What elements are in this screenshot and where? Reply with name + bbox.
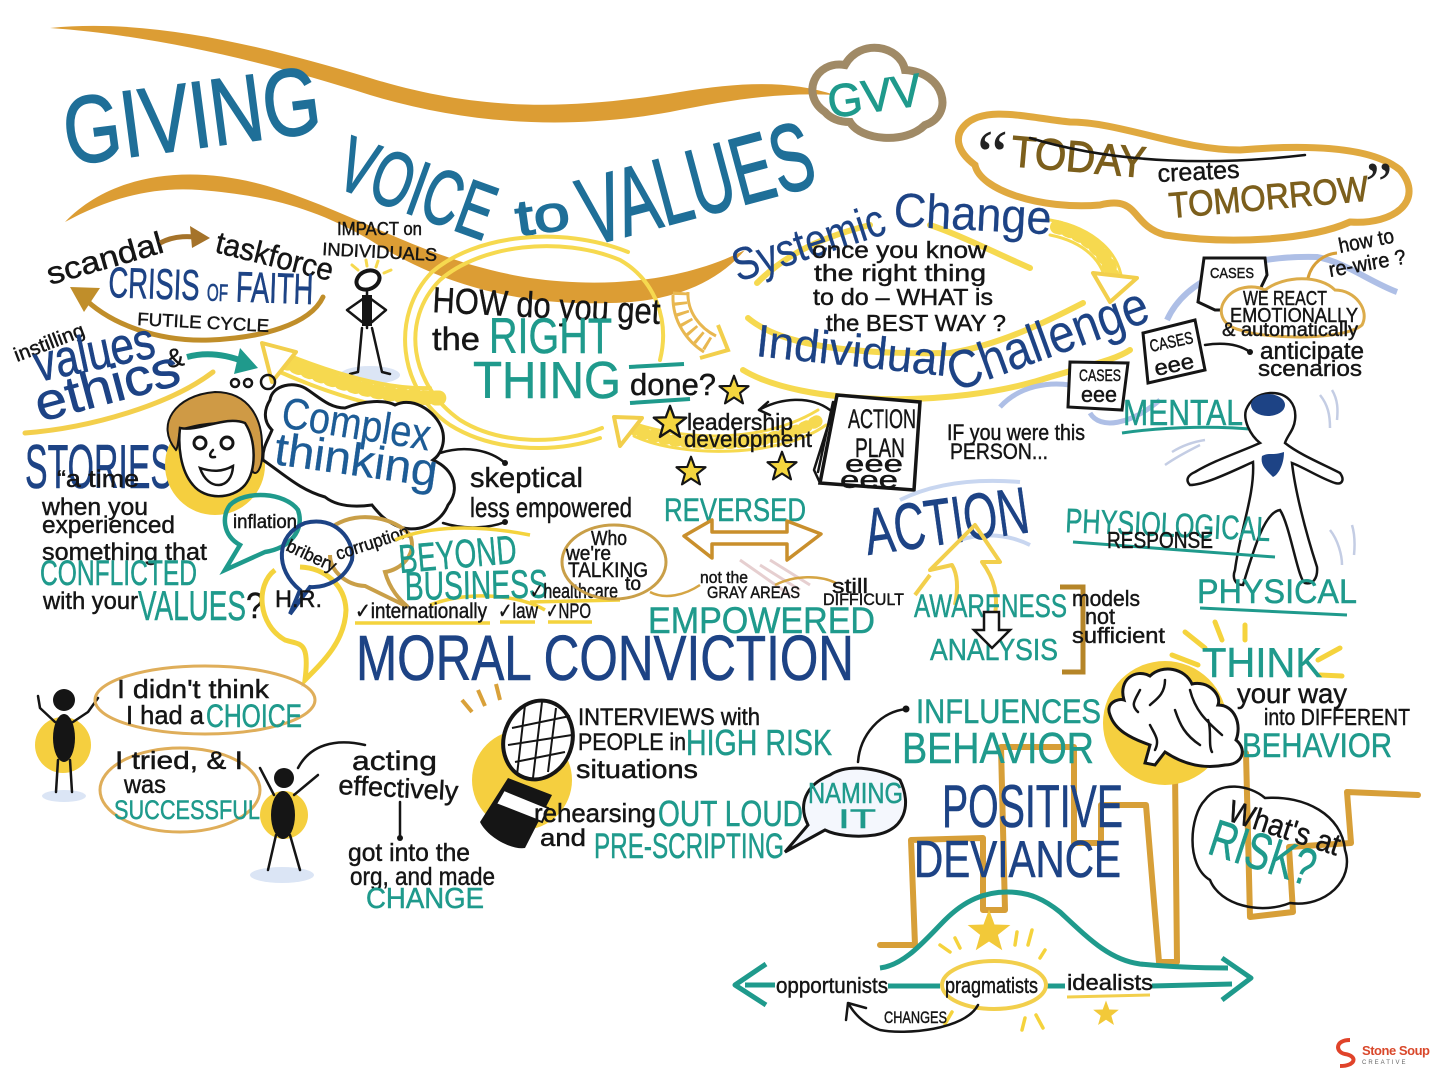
cases and reaction cluster: eee: [1081, 382, 1117, 407]
microphone with interview text: PEOPLE in: [578, 729, 686, 756]
right thing text: HOW do you get: [432, 279, 661, 332]
positive deviance: [914, 773, 1123, 889]
action plan notepad: PLAN: [855, 433, 905, 463]
who we're talking to bubble: to: [625, 574, 641, 595]
cases and reaction cluster: & automatically: [1222, 320, 1359, 341]
gold stepped line behind positive deviance: [880, 747, 1418, 962]
title: GIVING: [57, 47, 327, 186]
cases and reaction cluster: CASES: [1079, 366, 1121, 385]
cases and reaction cluster: CASES: [1148, 328, 1195, 356]
second figure acting effectively: org, and made: [350, 863, 495, 891]
cloud quote: today creates tomorrow: creates: [1157, 156, 1240, 188]
action plan notepad: eee: [845, 451, 903, 478]
skeptical and less empowered: skeptical: [470, 462, 583, 493]
complex thinking thought bubble: Complex: [278, 388, 434, 460]
what's at risk cloud: [1192, 787, 1347, 908]
stories text block: when you: [41, 494, 148, 521]
think your way with brain: your way: [1237, 678, 1347, 709]
left figure with choice bubble: CHOICE: [206, 698, 302, 734]
who we're talking to bubble: Who: [591, 528, 627, 550]
right thing text: done?: [630, 367, 716, 402]
empowered with notes: not the: [700, 568, 748, 587]
values and ethics: instilling: [11, 320, 88, 367]
rehearsing out loud and pre-scripting: OUT LOUD: [658, 793, 803, 834]
bell curve with opportunists pragmatists idealists: idealists: [1067, 970, 1153, 995]
beyond business: BUSINESS: [404, 563, 548, 609]
beyond business: [355, 528, 620, 623]
reversed with double arrow: REVERSED: [664, 492, 806, 528]
cases and reaction cluster: EMOTIONALLY: [1230, 305, 1358, 327]
awareness analysis action arrow: [914, 525, 1165, 672]
crisis of faith block: CRISIS OF FAITH: [108, 259, 314, 314]
title: to: [512, 184, 573, 247]
microphone with interview text: HIGH RISK: [686, 722, 832, 763]
if you were this person: IF you were this: [947, 420, 1085, 445]
reversed with double arrow: [664, 492, 821, 595]
awareness analysis action arrow: ANALYSIS: [930, 632, 1058, 667]
systemic change heading and text: Change: [892, 184, 1053, 245]
systemic change heading and text: to do – WHAT is: [813, 284, 993, 310]
successful bubble: [100, 747, 260, 832]
naming it speech bubble: NAMING: [808, 778, 903, 810]
right thing text: RIGHT: [489, 308, 612, 364]
beyond business: ✓healthcare: [530, 581, 618, 603]
cloud quote: today creates tomorrow: [958, 114, 1409, 240]
bell curve with opportunists pragmatists idealists: CHANGES: [884, 1008, 947, 1027]
right thing text: [432, 279, 716, 410]
empowered with notes: still: [832, 576, 868, 598]
influences behavior: BEHAVIOR: [902, 724, 1094, 773]
crisis of faith block: FUTILE CYCLE: [137, 309, 270, 336]
who we're talking to bubble: we're: [565, 543, 611, 565]
cases and reaction cluster: how to: [1337, 225, 1396, 258]
second figure acting effectively: acting: [352, 746, 437, 776]
awareness analysis action arrow: models: [1072, 586, 1140, 611]
stone soup creative logo: [1338, 1040, 1430, 1066]
stone soup creative logo: CREATIVE: [1362, 1060, 1408, 1066]
successful bubble: was: [123, 771, 166, 799]
bell curve with opportunists pragmatists idealists: opportunists: [776, 973, 888, 998]
values and ethics: values: [28, 312, 160, 394]
stars: leadership development: leadership: [687, 409, 793, 435]
think your way with brain: [1103, 622, 1410, 785]
influences behavior: [858, 693, 1101, 773]
cloud: GVV: [812, 48, 942, 138]
hatched gold arrow toward individual challenge: [673, 292, 728, 358]
body figure: [1165, 390, 1355, 585]
crisis of faith block: [42, 225, 337, 340]
big yellow circle around right thing: [405, 237, 663, 448]
second figure acting effectively: CHANGE: [366, 883, 484, 915]
cloud: GVV: GVV: [824, 63, 925, 128]
action plan notepad: ACTION: [848, 404, 916, 434]
second figure acting effectively: got into the: [348, 839, 470, 867]
values and ethics: ethics: [28, 339, 186, 434]
smiling face: [165, 392, 265, 515]
beyond business: ✓law: [498, 600, 539, 623]
awareness analysis action arrow: AWARENESS: [914, 588, 1067, 624]
speech bubbles: inflation bribery corruption: inflation: [233, 512, 297, 533]
empowered with notes: GRAY AREAS: [707, 583, 800, 602]
impact on individuals figure: [322, 219, 438, 384]
impact on individuals figure: INDIVIDUALS: [322, 239, 438, 265]
awareness analysis action arrow: sufficient: [1072, 623, 1165, 648]
stories text block: VALUES: [138, 582, 246, 629]
bell curve with opportunists pragmatists idealists: [735, 892, 1251, 1032]
skeptical and less empowered: [440, 449, 632, 527]
left figure with choice bubble: I didn't think: [117, 674, 270, 704]
cloud quote: today creates tomorrow: ”: [1365, 151, 1393, 219]
action plan notepad: [814, 395, 920, 494]
microphone with interview text: INTERVIEWS with: [578, 704, 760, 731]
speech bubbles: inflation bribery corruption: [225, 495, 412, 680]
skeptical and less empowered: less empowered: [470, 492, 632, 523]
positive deviance: POSITIVE: [942, 773, 1123, 840]
action heading: ACTION: [860, 473, 1033, 569]
systemic change heading and text: the right thing: [814, 260, 986, 286]
cases and reaction cluster: anticipate: [1260, 338, 1364, 365]
right thing text: the: [432, 321, 480, 357]
complex thinking thought bubble: [231, 375, 454, 529]
yellow loop around systemic change and individual challenge: [743, 220, 1137, 399]
banner swoosh: lower gold wave: [65, 174, 745, 303]
what's at risk cloud: What's at: [1224, 793, 1345, 863]
influences behavior: INFLUENCES: [916, 693, 1101, 731]
microphone with interview text: situations: [576, 754, 698, 784]
cases and reaction cluster: [1000, 225, 1408, 423]
who we're talking to bubble: TALKING: [568, 559, 648, 582]
stories text block: with your: [42, 588, 138, 615]
stories text block: ?: [246, 585, 264, 626]
complex thinking thought bubble: thinking: [272, 422, 441, 497]
mental heading: MENTAL: [1123, 392, 1243, 433]
yellow chevron arrow band toward crisis: [262, 343, 440, 412]
systemic change heading and text: [725, 184, 1053, 336]
cloud quote: today creates tomorrow: TOMORROW: [1167, 168, 1370, 226]
stories text block: experienced: [42, 512, 175, 539]
cloud quote: today creates tomorrow: “: [977, 117, 1008, 194]
stories text block: [25, 433, 264, 629]
physiological response: PHYSIOLOGICAL: [1065, 502, 1271, 549]
cases and reaction cluster: re-wire ?: [1327, 246, 1408, 282]
values and ethics: &: [164, 341, 186, 374]
individual challenge heading: Individual: [754, 314, 950, 386]
rehearsing out loud and pre-scripting: PRE-SCRIPTING: [594, 827, 784, 866]
action heading: [860, 473, 1033, 569]
awareness analysis action arrow: not: [1085, 604, 1115, 629]
what's at risk cloud: RISK?: [1202, 809, 1323, 898]
speech bubbles: inflation bribery corruption: bribery: [283, 535, 340, 576]
beyond business: ✓internationally: [355, 600, 487, 623]
banner swoosh: upper gold wave: [50, 26, 835, 122]
successful bubble: I tried, & I: [115, 747, 243, 775]
stories text block: STORIES: [25, 433, 173, 502]
physiological response: RESPONSE: [1107, 527, 1213, 553]
stories text block: CONFLICTED: [40, 554, 197, 593]
individual challenge heading: Challenge: [939, 275, 1156, 403]
stars: leadership development: [654, 376, 830, 484]
title: [57, 47, 825, 266]
think your way with brain: THINK: [1202, 639, 1322, 686]
empowered with notes: [648, 568, 904, 641]
stars: leadership development: development: [684, 426, 813, 452]
crisis of faith block: scandal: [42, 225, 167, 292]
title: VOICE: [327, 119, 508, 257]
think your way with brain: BEHAVIOR: [1242, 727, 1392, 765]
stories text block: something that: [42, 539, 207, 566]
positive deviance: DEVIANCE: [914, 831, 1121, 889]
if you were this person: [947, 420, 1085, 464]
cloud quote: today creates tomorrow: TODAY: [1009, 127, 1148, 188]
left figure with choice bubble: I had a: [126, 700, 205, 730]
cases and reaction cluster: CASES: [1210, 265, 1254, 282]
if you were this person: PERSON...: [950, 439, 1048, 464]
speech bubbles: inflation bribery corruption: H.R.: [275, 586, 322, 613]
microphone with interview text: [462, 684, 832, 848]
empowered with notes: EMPOWERED: [648, 600, 875, 641]
title: VALUES: [568, 101, 825, 266]
naming it speech bubble: [785, 768, 906, 852]
systemic change heading and text: the BEST WAY ?: [826, 310, 1006, 336]
right thing text: THING: [473, 352, 621, 410]
stone soup creative logo: Stone Soup: [1362, 1043, 1430, 1058]
cases and reaction cluster: scenarios: [1258, 356, 1362, 381]
systemic change heading and text: Systemic: [725, 193, 891, 292]
action plan notepad: eee: [840, 467, 898, 494]
beyond business: ✓NPO: [546, 600, 591, 623]
moral conviction heading: MORAL CONVICTION: [356, 622, 854, 694]
impact on individuals figure: IMPACT on: [337, 219, 422, 239]
rehearsing out loud and pre-scripting: rehearsing: [534, 798, 656, 828]
who we're talking to bubble: [562, 525, 666, 599]
left figure with choice bubble: [35, 666, 315, 802]
rehearsing out loud and pre-scripting: and: [540, 825, 586, 852]
speech bubbles: inflation bribery corruption: corruption: [333, 521, 412, 564]
bell curve with opportunists pragmatists idealists: pragmatists: [945, 973, 1038, 998]
hatched yellow arrow toward right thing: [614, 410, 826, 451]
individual challenge heading: [754, 275, 1156, 403]
think your way with brain: into DIFFERENT: [1264, 704, 1410, 730]
physical heading: PHYSICAL: [1197, 573, 1357, 611]
second figure acting effectively: effectively: [338, 770, 460, 806]
naming it speech bubble: IT: [838, 804, 876, 834]
crisis of faith block: taskforce: [212, 225, 337, 288]
rehearsing out loud and pre-scripting: [534, 793, 803, 866]
systemic change heading and text: once you know: [812, 237, 987, 263]
cases and reaction cluster: WE REACT: [1243, 288, 1327, 310]
successful bubble: SUCCESSFUL: [114, 795, 260, 825]
stories text block: “a time: [57, 466, 139, 493]
cases and reaction cluster: eee: [1152, 348, 1196, 381]
empowered with notes: DIFFICULT: [823, 590, 904, 609]
values and ethics: [11, 312, 258, 434]
second figure acting effectively: [250, 742, 495, 915]
beyond business: BEYOND: [397, 528, 518, 582]
